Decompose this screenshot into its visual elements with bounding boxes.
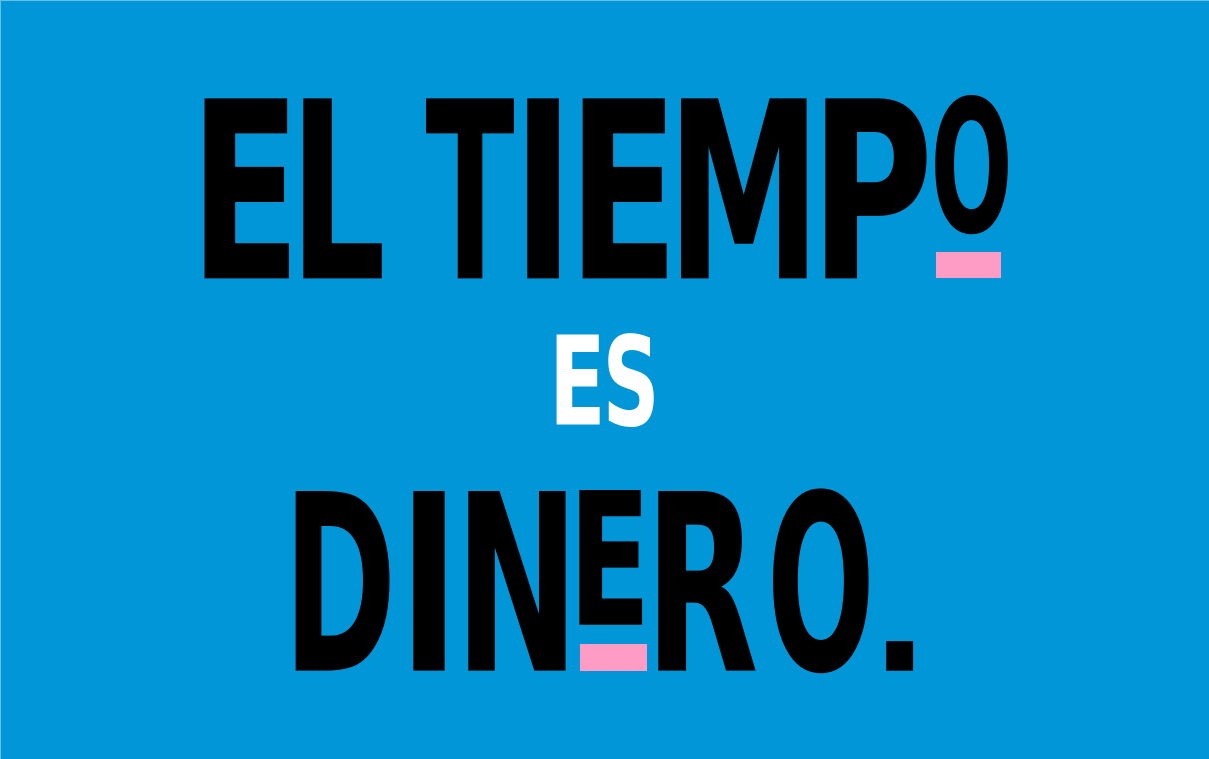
heading line: EL TIEMPO: M [667, 49, 821, 337]
poster background: N [455, 442, 579, 729]
poster background: I [398, 442, 460, 729]
heading line: EL TIEMPO: L [289, 49, 386, 337]
poster background: S [603, 310, 659, 454]
heading line: EL TIEMPO [190, 49, 1013, 674]
heading line: EL TIEMPO: E [568, 49, 678, 337]
poster background: D [283, 442, 397, 729]
accent bar under O [936, 252, 1001, 278]
poster background: E [549, 310, 606, 454]
poster background: R [645, 442, 759, 729]
poster background: . [871, 525, 929, 708]
poster background: O [767, 443, 875, 727]
heading line: DINERO. [283, 442, 929, 729]
heading line: EL TIEMPO: E [190, 49, 301, 337]
poster background: E [568, 453, 651, 668]
heading line: EL TIEMPO: O [930, 61, 1013, 275]
heading line: EL TIEMPO: P [810, 49, 933, 337]
accent bar under E [580, 644, 647, 671]
heading line: EL TIEMPO: T [425, 49, 515, 337]
heading line: EL TIEMPO: I [512, 49, 574, 337]
connector word: ES [508, 310, 869, 674]
